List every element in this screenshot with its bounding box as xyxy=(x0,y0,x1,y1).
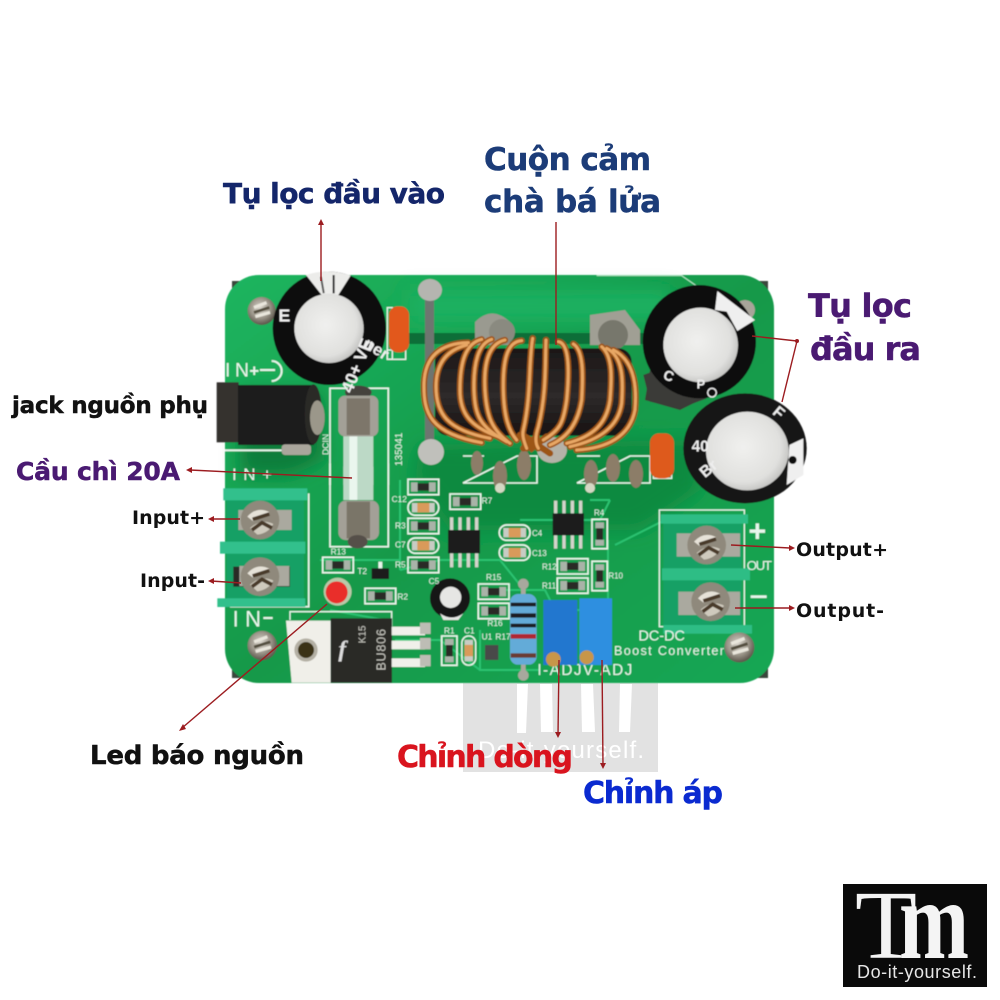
small silk labels: R12 xyxy=(542,562,557,571)
transistor bu806: K15 xyxy=(358,625,369,643)
silk labels left: C5 xyxy=(429,576,440,586)
label: fuse: Cầu chì 20A xyxy=(16,457,181,486)
arrow: input plus xyxy=(208,516,240,522)
mounting screw bottom left xyxy=(248,631,277,660)
label: inductor xyxy=(484,142,661,220)
silk and in plus: + xyxy=(249,362,259,381)
bolt pads xyxy=(475,310,640,350)
transistor bu806 xyxy=(286,618,431,683)
silk labels left: R3 xyxy=(395,520,406,530)
input capacitor: ner xyxy=(361,334,393,364)
logo: Do-it-yourself. xyxy=(857,962,977,982)
top capacitor xyxy=(643,285,756,408)
fuse bottom cap xyxy=(338,467,379,548)
orange capacitor xyxy=(387,306,409,359)
arrow: output capacitors xyxy=(752,336,799,402)
arrow: output plus xyxy=(731,545,795,551)
silk text right: + xyxy=(748,515,766,549)
label: output filter capacitor: Tụ lọc xyxy=(808,287,912,325)
silk and in plus xyxy=(225,361,282,382)
pcb panel xyxy=(225,275,774,683)
circuit board photo xyxy=(217,271,807,683)
mosfet pads xyxy=(463,437,650,493)
components left half xyxy=(217,463,511,683)
in plus lower silk: IN+ xyxy=(232,465,272,484)
top capacitor: C xyxy=(661,366,676,385)
silk text right: Boost Converter xyxy=(614,644,724,658)
inductor xyxy=(424,338,636,453)
silk labels left: R5 xyxy=(395,559,406,569)
logo: T xyxy=(855,872,917,980)
label: input plus: Input+ xyxy=(132,507,205,529)
arrow: voltage trim xyxy=(600,660,606,769)
components right half xyxy=(499,501,772,681)
transistor outline xyxy=(290,612,392,627)
bottom capacitor: 40 xyxy=(692,439,709,456)
copper traces xyxy=(320,480,665,670)
label: current adjust: Chỉnh dòng xyxy=(397,740,573,775)
silk labels left: C12 xyxy=(392,494,407,504)
fuse top xyxy=(330,386,388,485)
silk labels left: C7 xyxy=(395,540,406,550)
right terminal block xyxy=(659,510,752,634)
silk labels left: R7 xyxy=(482,495,493,505)
label: inductor: Cuộn cảm xyxy=(484,142,651,178)
label: input minus: Input- xyxy=(140,570,205,592)
small silk labels: C4 xyxy=(532,529,543,538)
arrow: input capacitor xyxy=(318,219,324,281)
silk corner xyxy=(597,276,700,288)
label: input filter capacitor: Tụ lọc đầu vào xyxy=(223,177,445,210)
small silk labels xyxy=(532,508,624,591)
fuse bottom frame xyxy=(330,463,388,547)
dark band under bolts xyxy=(405,333,645,344)
arrow: led xyxy=(179,604,327,731)
label: auxiliary jack: jack nguồn phụ xyxy=(11,392,208,419)
input capacitor: 40+ VE xyxy=(337,335,377,395)
diode lead xyxy=(418,279,444,465)
dc jack xyxy=(217,382,325,455)
label: voltage adjust: Chỉnh áp xyxy=(583,776,723,811)
135041 silk: 135041 xyxy=(394,432,405,466)
top capacitor: P xyxy=(697,377,706,391)
silk text right: DC-DC xyxy=(638,629,685,645)
trimmer potentiometers xyxy=(543,598,612,667)
transistor bu806: BU806 xyxy=(375,629,389,671)
silk labels left: U1 xyxy=(482,631,493,641)
logo: m xyxy=(899,859,969,983)
watermark panel: Do-it-yourself. xyxy=(478,737,644,764)
logo xyxy=(843,859,987,987)
silk labels left: R16 xyxy=(487,618,503,628)
status led xyxy=(324,578,352,606)
output capacitor wrap shadow xyxy=(645,370,700,410)
arrow: current trim xyxy=(555,660,561,738)
corner marks xyxy=(232,281,768,678)
input capacitor xyxy=(273,271,393,395)
mounting screw top left xyxy=(248,297,276,325)
silk text right xyxy=(537,515,772,679)
label: output plus: Output+ xyxy=(796,539,888,561)
small silk labels: C13 xyxy=(532,549,547,558)
arrow: input minus xyxy=(208,578,241,584)
arrows xyxy=(179,219,799,769)
resistors r4 r10 r11 r12 xyxy=(499,519,607,593)
silk labels left: R17 xyxy=(495,631,511,641)
label: output filter capacitor xyxy=(808,287,921,368)
silk text right: I-ADJV-ADJ xyxy=(537,662,632,679)
silk labels left: R1 xyxy=(444,625,455,635)
input capacitor: E xyxy=(278,306,290,326)
mounting screw hidden xyxy=(735,300,755,320)
bottom capacitor: Br xyxy=(697,457,721,481)
dcin silk: DCIN xyxy=(321,434,331,455)
component top left xyxy=(217,271,409,485)
arrow: output minus xyxy=(735,605,795,611)
winding highlights xyxy=(424,338,636,450)
arrow: fuse xyxy=(186,467,352,478)
label: inductor: chà bá lửa xyxy=(484,184,661,220)
in minus silk: IN xyxy=(233,607,261,632)
silk labels left: R2 xyxy=(397,591,408,601)
small silk labels: R4 xyxy=(594,508,605,517)
label: output minus: Output- xyxy=(796,600,884,622)
silk labels left: T2 xyxy=(357,566,367,576)
ic top right xyxy=(553,501,584,549)
label: output filter capacitor: đầu ra xyxy=(810,330,921,368)
silk text right: OUT xyxy=(747,558,772,573)
copper windings xyxy=(424,338,636,453)
transistor bu806: f xyxy=(338,637,348,663)
arrow: inductor xyxy=(555,222,557,345)
small silk labels: R11 xyxy=(542,582,557,591)
output capacitors xyxy=(597,276,807,503)
silk labels left xyxy=(331,494,511,641)
orange capacitor right xyxy=(650,433,674,478)
power resistor xyxy=(510,579,537,681)
silk labels left: C1 xyxy=(464,625,475,635)
silk labels left: R13 xyxy=(331,547,346,557)
small transistors xyxy=(372,562,498,660)
silk and in plus: IN xyxy=(225,361,249,382)
bottom capacitor: F xyxy=(769,403,788,423)
smd row left xyxy=(323,479,509,665)
bottom capacitor xyxy=(683,393,807,503)
ic left xyxy=(448,517,480,567)
left terminal block xyxy=(217,488,309,607)
silk labels left: R15 xyxy=(486,572,502,582)
watermark panel xyxy=(463,683,658,772)
label: power led: Led báo nguồn xyxy=(90,740,304,771)
mounting screw bottom right xyxy=(724,632,754,662)
small silk labels: R10 xyxy=(608,571,624,580)
small capacitor c5 xyxy=(430,578,470,620)
board shading xyxy=(240,290,700,530)
